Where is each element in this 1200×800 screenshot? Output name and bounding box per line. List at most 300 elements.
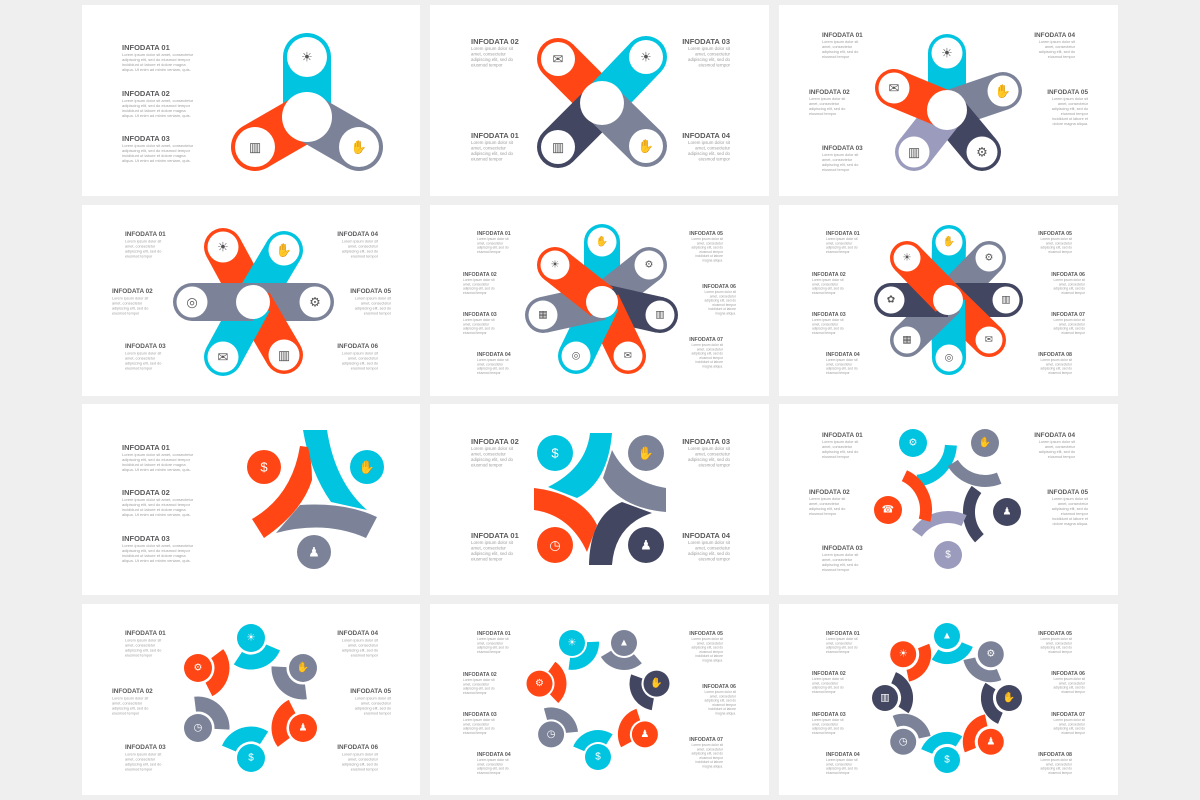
arc: dark: [636, 676, 653, 704]
arm: dark left: ✿: [887, 294, 895, 306]
text: INFODATA 02: amet, consectetur: [463, 282, 490, 286]
text: INFODATA 04: amet, consectetur: [695, 546, 731, 550]
text: INFODATA 02: adipiscing elit, sed do: [463, 287, 495, 291]
node: orange head: [526, 671, 552, 697]
text: INFODATA 02: [122, 488, 194, 517]
text: INFODATA 02: incididunt ut labore et dolore magna: [122, 507, 186, 512]
text: INFODATA 02: amet, consectetur: [809, 102, 840, 106]
text: INFODATA 06: eiusmod tempor: [1061, 291, 1086, 295]
text: INFODATA 02: INFODATA 02: [112, 688, 153, 695]
text: INFODATA 05: eiusmod tempor: [1061, 512, 1089, 516]
text: INFODATA 06: INFODATA 06: [702, 284, 736, 290]
text: INFODATA 05: INFODATA 05: [689, 231, 723, 237]
arc: gray top-right: [279, 667, 306, 692]
text: INFODATA 01: Lorem ipsum dolor sit: [125, 240, 162, 244]
text: INFODATA 03: aliqua. Ut enim ad minim veniam, quis.: [122, 558, 191, 563]
panel: slide 8 (4 bands): [430, 404, 769, 595]
arm: orange bottom-right: ▥: [278, 348, 290, 362]
text: INFODATA 05: amet, consectetur: [1058, 102, 1089, 106]
node: gray rocket: ▲: [619, 638, 629, 648]
text: INFODATA 06: INFODATA 06: [1051, 671, 1085, 677]
arm: orange top-left: ☀: [217, 240, 229, 254]
text: INFODATA 04: eiusmod tempor: [1048, 55, 1076, 59]
text: INFODATA 03: [122, 134, 194, 163]
text: INFODATA 03: INFODATA 03: [125, 744, 166, 751]
text: INFODATA 05: dolore magna aliqua.: [1053, 522, 1088, 526]
text: INFODATA 07: [689, 337, 724, 368]
text: INFODATA 07: magna aliqua.: [702, 364, 723, 368]
text: INFODATA 08: eiusmod tempor: [1048, 371, 1073, 375]
text: INFODATA 06: magna aliqua.: [715, 712, 736, 716]
text: INFODATA 06: [702, 284, 737, 316]
text: INFODATA 04: eiusmod tempor: [826, 371, 851, 375]
text: INFODATA 01: Lorem ipsum dolor sit: [826, 237, 858, 241]
text: INFODATA 04: Lorem ipsum dolor sit: [688, 540, 731, 545]
arm: orange: ✉: [889, 80, 899, 96]
text: INFODATA 02: eiusmod tempor: [812, 690, 837, 694]
text: INFODATA 06: amet, consectetur: [348, 356, 379, 360]
text: INFODATA 03: [822, 545, 863, 572]
text: INFODATA 06: incididunt ut labore: [708, 307, 736, 311]
text: INFODATA 02: Lorem ipsum dolor sit: [809, 497, 846, 501]
text: INFODATA 06: eiusmod tempor: [712, 703, 737, 707]
arm: cyan top: ✋: [943, 234, 955, 248]
text: INFODATA 05: magna aliqua.: [702, 258, 723, 262]
text: INFODATA 02: Lorem ipsum dolor sit amet, consectetur: [122, 98, 194, 103]
text: INFODATA 05: amet, consectetur: [697, 241, 724, 245]
text: INFODATA 02: eiusmod tempor: [809, 512, 837, 516]
text: INFODATA 02: Lorem ipsum dolor sit: [112, 696, 149, 700]
panel: slide 10 (6 arcs): [82, 604, 420, 795]
text: INFODATA 05: eiusmod tempor: [364, 712, 392, 716]
text: INFODATA 04: INFODATA 04: [682, 531, 731, 540]
text: INFODATA 03: INFODATA 03: [822, 545, 863, 552]
text: INFODATA 02: [812, 272, 846, 295]
node: dark chart: [872, 685, 898, 711]
text: INFODATA 06: INFODATA 06: [702, 684, 736, 690]
text: INFODATA 01: adipiscing elit, sed do: [125, 648, 161, 652]
text: INFODATA 03: eiusmod tempor: [812, 331, 837, 335]
text: INFODATA 06: Lorem ipsum dolor sit: [342, 752, 379, 756]
text: INFODATA 05: amet, consectetur: [361, 302, 392, 306]
text: INFODATA 05: Lorem ipsum dolor sit: [355, 296, 392, 300]
text: INFODATA 05: adipiscing elit, sed do: [1040, 646, 1072, 650]
text: INFODATA 03: amet, consectetur: [463, 722, 490, 726]
text: INFODATA 07: [1051, 712, 1086, 735]
text: INFODATA 02: [809, 89, 850, 116]
text: INFODATA 02: adipiscing elit, sed do: [809, 507, 845, 511]
text: INFODATA 08: INFODATA 08: [1038, 352, 1072, 358]
arm: cyan: [584, 224, 620, 302]
node: gray clock: [890, 729, 916, 755]
text: INFODATA 07: adipiscing elit, sed do: [1053, 727, 1085, 731]
text: INFODATA 07: adipiscing elit, sed do: [1053, 327, 1085, 331]
text: INFODATA 07: adipiscing elit, sed do: [691, 752, 723, 756]
arm: orange: ✉: [553, 52, 563, 66]
text: INFODATA 03: Lorem ipsum dolor sit: [125, 752, 162, 756]
arm: gray right: ⚙: [309, 294, 321, 310]
band: cyan: [548, 433, 612, 498]
diagram: 8-arm pinwheel: [874, 225, 1023, 375]
text: INFODATA 05: [689, 631, 724, 662]
text: INFODATA 03: eiusmod tempor: [463, 731, 488, 735]
text: INFODATA 05: [350, 688, 392, 716]
node: lavender dollar: $: [945, 550, 951, 560]
text: INFODATA 04: Lorem ipsum dolor sit: [1039, 440, 1076, 444]
text: INFODATA 07: INFODATA 07: [689, 737, 723, 743]
diagram: 7-node arc ring: [526, 630, 670, 770]
arm: orange top-left: ☀: [903, 252, 912, 264]
node: cyan dollar: [585, 744, 611, 770]
text: INFODATA 01: Lorem ipsum dolor sit: [826, 637, 858, 641]
text: INFODATA 01: adipiscing elit, sed do eiusmod tempor: [122, 457, 191, 462]
arm: cyan top: [932, 225, 966, 300]
text: INFODATA 03: Lorem ipsum dolor sit: [822, 553, 859, 557]
text: INFODATA 01: [471, 531, 519, 562]
text: INFODATA 03: adipiscing elit, sed do: [812, 327, 844, 331]
node: dark people: [993, 498, 1021, 526]
text: INFODATA 05: eiusmod tempor: [699, 250, 724, 254]
text: INFODATA 02: Lorem ipsum dolor sit amet, consectetur: [122, 497, 194, 502]
text: INFODATA 07: eiusmod tempor: [1061, 731, 1086, 735]
text: INFODATA 03: [125, 343, 166, 370]
text: INFODATA 05: incididunt ut labore et: [1052, 117, 1089, 121]
text: INFODATA 02: Lorem ipsum dolor sit: [809, 97, 846, 101]
arm: gray top-right: ⚙: [985, 252, 993, 264]
arm: gray: [602, 247, 667, 302]
text: INFODATA 04: adipiscing elit, sed do: [477, 767, 509, 771]
text: INFODATA 01: INFODATA 01: [822, 32, 863, 39]
node: gray head: [978, 641, 1004, 667]
text: INFODATA 03: [822, 145, 863, 172]
arm: cyan top-right: [253, 231, 303, 302]
arm: cyan top-right: ✋: [276, 242, 292, 258]
icon circle: orange dollar: $: [260, 460, 268, 474]
text: INFODATA 03: aliqua. Ut enim ad minim veniam, quis.: [122, 158, 191, 163]
text: INFODATA 05: incididunt ut labore et: [1052, 517, 1089, 521]
arc: dark: [969, 489, 979, 538]
node: cyan bulb: [237, 624, 265, 652]
text: INFODATA 02: amet, consectetur: [471, 452, 506, 456]
text: INFODATA 02: eiusmod tempor: [812, 291, 837, 295]
text: INFODATA 02: adipiscing elit, sed do: [463, 687, 495, 691]
text: INFODATA 08: amet, consectetur: [1046, 362, 1073, 366]
text: INFODATA 05: Lorem ipsum dolor sit: [691, 237, 723, 241]
text: INFODATA 06: adipiscing elit, sed do: [1053, 686, 1085, 690]
node: cyan dollar: [934, 747, 960, 773]
arm: dark: [947, 110, 1001, 171]
text: INFODATA 01: [125, 630, 166, 658]
text: INFODATA 01: Lorem ipsum dolor sit: [477, 237, 509, 241]
arc: dark left: [894, 678, 907, 710]
text: INFODATA 02: eiusmod tempor: [471, 62, 503, 68]
text: INFODATA 02: [809, 489, 850, 516]
text: INFODATA 03: adipiscing elit, sed do: [463, 327, 495, 331]
text: INFODATA 03: amet, consectetur: [125, 356, 156, 360]
text: INFODATA 08: adipiscing elit, sed do: [1040, 767, 1072, 771]
text: INFODATA 02: aliqua. Ut enim ad minim veniam, quis.: [122, 113, 191, 118]
text: INFODATA 02: eiusmod tempor: [112, 712, 140, 716]
arm: cyan: [283, 33, 331, 117]
text: INFODATA 07: magna aliqua.: [702, 764, 723, 768]
arc: gray: [953, 463, 999, 481]
arm: orange top-left: [204, 228, 253, 302]
text: INFODATA 07: eiusmod tempor: [1061, 331, 1086, 335]
text: INFODATA 07: incididunt ut labore: [695, 760, 723, 764]
text: INFODATA 02: [471, 37, 519, 68]
text: INFODATA 04: INFODATA 04: [477, 752, 511, 758]
text: INFODATA 02: [112, 688, 153, 716]
text: INFODATA 05: adipiscing elit, sed do: [691, 246, 723, 250]
text: INFODATA 07: incididunt ut labore: [695, 360, 723, 364]
text: INFODATA 01: [122, 43, 194, 72]
panel: slide 6 (8 arms): [779, 205, 1118, 396]
text: INFODATA 05: amet, consectetur: [1046, 241, 1073, 245]
diagram: 5-arm pinwheel: [875, 34, 1022, 171]
text: INFODATA 07: Lorem ipsum dolor sit: [1053, 718, 1085, 722]
text: INFODATA 03: Lorem ipsum dolor sit amet, consectetur: [122, 143, 194, 148]
text: INFODATA 03: amet, consectetur: [463, 322, 490, 326]
text: INFODATA 03: [812, 312, 846, 335]
text: INFODATA 03: [122, 534, 194, 563]
center hole: [933, 285, 963, 315]
center hole: [586, 286, 618, 318]
text: INFODATA 03: INFODATA 03: [122, 134, 170, 143]
text: INFODATA 06: [1051, 671, 1086, 694]
text: INFODATA 01: Lorem ipsum dolor sit: [822, 440, 859, 444]
text: INFODATA 07: Lorem ipsum dolor sit: [691, 343, 723, 347]
text: INFODATA 01: incididunt ut labore et dolore magna: [122, 62, 186, 67]
text: INFODATA 02: [122, 89, 194, 118]
node: cyan dollar: $: [248, 752, 254, 764]
arc: cyan bottom: [229, 734, 264, 749]
arm: gray 2: [525, 297, 602, 333]
text: INFODATA 01: aliqua. Ut enim ad minim veniam, quis.: [122, 67, 191, 72]
text: INFODATA 05: Lorem ipsum dolor sit: [1052, 497, 1089, 501]
arm: gray left: ◎: [186, 294, 198, 310]
text: INFODATA 06: adipiscing elit, sed do: [342, 362, 378, 366]
arm: gray: ✋: [351, 140, 367, 154]
panel: slide 1 (3 arms): [82, 5, 420, 196]
arm: orange: [602, 302, 646, 374]
text: INFODATA 05: adipiscing elit, sed do: [691, 646, 723, 650]
text: INFODATA 01: adipiscing elit, sed do: [471, 551, 514, 556]
node: gray clock: ◷: [899, 736, 908, 747]
text: INFODATA 02: amet, consectetur: [463, 682, 490, 686]
diagram: 7-arm pinwheel: [525, 224, 678, 374]
text: INFODATA 04: INFODATA 04: [826, 352, 860, 358]
text: INFODATA 06: Lorem ipsum dolor sit: [704, 290, 736, 294]
text: INFODATA 01: amet, consectetur: [822, 445, 853, 449]
text: INFODATA 04: amet, consectetur: [695, 146, 731, 150]
text: INFODATA 02: eiusmod tempor: [463, 691, 488, 695]
text: INFODATA 04: INFODATA 04: [682, 131, 731, 140]
text: INFODATA 06: magna aliqua.: [715, 312, 736, 316]
text: INFODATA 03: amet, consectetur: [822, 158, 853, 162]
text: INFODATA 03: amet, consectetur: [695, 52, 731, 56]
node: orange people: [632, 721, 658, 747]
text: INFODATA 05: amet, consectetur: [1046, 641, 1073, 645]
text: INFODATA 02: adipiscing elit, sed do: [809, 107, 845, 111]
arm: orange: [875, 69, 947, 110]
text: INFODATA 03: adipiscing elit, sed do: [812, 727, 844, 731]
text: INFODATA 02: Lorem ipsum dolor sit: [463, 678, 495, 682]
arc: cyan 1: [569, 642, 593, 664]
text: INFODATA 03: INFODATA 03: [812, 312, 846, 318]
text: INFODATA 02: [463, 272, 497, 295]
text: INFODATA 04: Lorem ipsum dolor sit: [342, 638, 379, 642]
text: INFODATA 05: [1047, 489, 1089, 526]
text: INFODATA 01: adipiscing elit, sed do: [826, 646, 858, 650]
text: INFODATA 04: INFODATA 04: [826, 752, 860, 758]
text: INFODATA 03: Lorem ipsum dolor sit: [463, 718, 495, 722]
text: INFODATA 02: INFODATA 02: [471, 437, 519, 446]
text: INFODATA 03: INFODATA 03: [463, 312, 497, 318]
text: INFODATA 04: Lorem ipsum dolor sit: [477, 758, 509, 762]
text: INFODATA 03: eiusmod tempor: [822, 568, 850, 572]
text: INFODATA 03: Lorem ipsum dolor sit: [125, 352, 162, 356]
text: INFODATA 02: INFODATA 02: [463, 272, 497, 278]
arm: cyan bottom: ◎: [945, 352, 953, 364]
text: INFODATA 04: INFODATA 04: [477, 352, 511, 358]
text: INFODATA 01: adipiscing elit, sed do: [826, 246, 858, 250]
text: INFODATA 03: eiusmod tempor: [463, 331, 488, 335]
text: INFODATA 06: amet, consectetur: [1059, 282, 1086, 286]
text: INFODATA 08: Lorem ipsum dolor sit: [1040, 358, 1072, 362]
arc: gray bottom-left: [895, 720, 925, 737]
text: INFODATA 05: INFODATA 05: [350, 288, 391, 295]
text: INFODATA 04: [682, 131, 731, 162]
arm: cyan: [928, 34, 966, 110]
text: INFODATA 08: eiusmod tempor: [1048, 771, 1073, 775]
node: cyan bulb: ☀: [247, 632, 256, 644]
arm: gray: ✋: [638, 138, 654, 154]
text: INFODATA 03: INFODATA 03: [822, 145, 863, 152]
panel: slide 4 (6 arms): [82, 205, 420, 396]
text: INFODATA 03: INFODATA 03: [682, 437, 730, 446]
node: gray rocket: [611, 630, 637, 656]
arc: lavender: [917, 517, 964, 533]
text: INFODATA 05: [350, 288, 392, 316]
text: INFODATA 07: eiusmod tempor: [699, 356, 724, 360]
diagram: 6-node arc ring: [184, 624, 317, 772]
text: INFODATA 03: Lorem ipsum dolor sit amet, consectetur: [122, 543, 194, 548]
text: INFODATA 03: adipiscing elit, sed do: [688, 457, 731, 462]
text: INFODATA 02: eiusmod tempor: [809, 112, 837, 116]
text: INFODATA 01: aliqua. Ut enim ad minim veniam, quis.: [122, 467, 191, 472]
text: INFODATA 04: Lorem ipsum dolor sit: [1039, 40, 1076, 44]
panel: slide 9 (5 arcs): [779, 404, 1118, 595]
text: INFODATA 01: INFODATA 01: [471, 131, 519, 140]
text: INFODATA 07: INFODATA 07: [689, 337, 723, 343]
text: INFODATA 07: INFODATA 07: [1051, 712, 1085, 718]
text: INFODATA 01: eiusmod tempor: [125, 654, 153, 658]
text: INFODATA 06: INFODATA 06: [337, 744, 378, 751]
text: INFODATA 01: eiusmod tempor: [826, 250, 851, 254]
band: orange: [252, 446, 312, 538]
text: INFODATA 03: incididunt ut labore et dolore magna: [122, 553, 186, 558]
text: INFODATA 01: [477, 231, 511, 254]
text: INFODATA 02: adipiscing elit, sed do: [112, 706, 148, 710]
arm: dark: [602, 297, 678, 333]
text: INFODATA 05: [1038, 231, 1073, 254]
text: INFODATA 05: Lorem ipsum dolor sit: [355, 696, 392, 700]
text: INFODATA 04: amet, consectetur: [826, 362, 853, 366]
text: INFODATA 02: INFODATA 02: [112, 288, 153, 295]
band: gray: [603, 450, 666, 512]
text: INFODATA 01: INFODATA 01: [826, 231, 860, 237]
text: INFODATA 02: eiusmod tempor: [471, 462, 503, 468]
text: INFODATA 07: Lorem ipsum dolor sit: [691, 743, 723, 747]
text: INFODATA 06: Lorem ipsum dolor sit: [1053, 677, 1085, 681]
text: INFODATA 01: INFODATA 01: [477, 231, 511, 237]
text: INFODATA 01: eiusmod tempor: [822, 55, 850, 59]
text: INFODATA 06: Lorem ipsum dolor sit: [1053, 278, 1085, 282]
text: INFODATA 02: INFODATA 02: [812, 671, 846, 677]
text: INFODATA 01: [471, 131, 519, 162]
text: INFODATA 06: eiusmod tempor: [1061, 690, 1086, 694]
panel: slide 11 (7 arcs): [430, 604, 769, 795]
text: INFODATA 02: INFODATA 02: [122, 488, 170, 497]
text: INFODATA 03: adipiscing elit, sed do: [822, 163, 858, 167]
text: INFODATA 04: [477, 352, 511, 375]
node: orange head: ⚙: [194, 662, 202, 674]
node: gray clock: [538, 721, 564, 747]
icon circle: cyan handshake: ✋: [359, 460, 375, 474]
text: INFODATA 03: adipiscing elit, sed do: [125, 362, 161, 366]
text: INFODATA 07: amet, consectetur: [1059, 722, 1086, 726]
text: INFODATA 06: Lorem ipsum dolor sit: [342, 352, 379, 356]
arm: lavender: [895, 110, 947, 171]
text: INFODATA 02: adipiscing elit, sed do: [471, 57, 514, 62]
text: INFODATA 03: INFODATA 03: [125, 343, 166, 350]
arm: dark: ▥: [552, 140, 564, 154]
arc: cyan top: [935, 645, 967, 658]
text: INFODATA 05: adipiscing elit, sed do: [1052, 507, 1088, 511]
text: INFODATA 03: Lorem ipsum dolor sit: [812, 318, 844, 322]
text: INFODATA 05: Lorem ipsum dolor sit: [1040, 237, 1072, 241]
text: INFODATA 04: INFODATA 04: [1034, 432, 1075, 439]
text: INFODATA 01: eiusmod tempor: [822, 455, 850, 459]
text: INFODATA 02: amet, consectetur: [112, 702, 143, 706]
text: INFODATA 04: eiusmod tempor: [699, 156, 731, 162]
text: INFODATA 02: adipiscing elit, sed do: [812, 686, 844, 690]
text: INFODATA 02: adipiscing elit, sed do eiusmod tempor: [122, 502, 191, 507]
text: INFODATA 04: [337, 630, 379, 658]
text: INFODATA 03: amet, consectetur: [695, 452, 731, 456]
text: INFODATA 08: adipiscing elit, sed do: [1040, 367, 1072, 371]
text: INFODATA 03: eiusmod tempor: [812, 731, 837, 735]
text: INFODATA 05: INFODATA 05: [1038, 631, 1072, 637]
arm: orange bottom-right: [948, 300, 1006, 357]
text: INFODATA 07: [1051, 312, 1086, 335]
center hole: [282, 92, 332, 142]
text: INFODATA 08: [1038, 752, 1073, 775]
text: INFODATA 05: amet, consectetur: [361, 702, 392, 706]
text: INFODATA 01: Lorem ipsum dolor sit: [822, 40, 859, 44]
diagram: 5-node arc ring: [874, 429, 1021, 569]
text: INFODATA 05: magna aliqua.: [702, 658, 723, 662]
band: orange: [534, 488, 597, 552]
icon circle: dark people: ♟: [640, 538, 652, 552]
text: INFODATA 06: [1051, 272, 1086, 295]
text: INFODATA 05: incididunt ut labore: [695, 654, 723, 658]
node: cyan dollar: $: [595, 752, 601, 762]
text: INFODATA 04: INFODATA 04: [337, 231, 378, 238]
text: INFODATA 06: [337, 343, 379, 370]
arm: gray 2: ▦: [538, 310, 548, 320]
text: INFODATA 03: amet, consectetur: [812, 722, 839, 726]
